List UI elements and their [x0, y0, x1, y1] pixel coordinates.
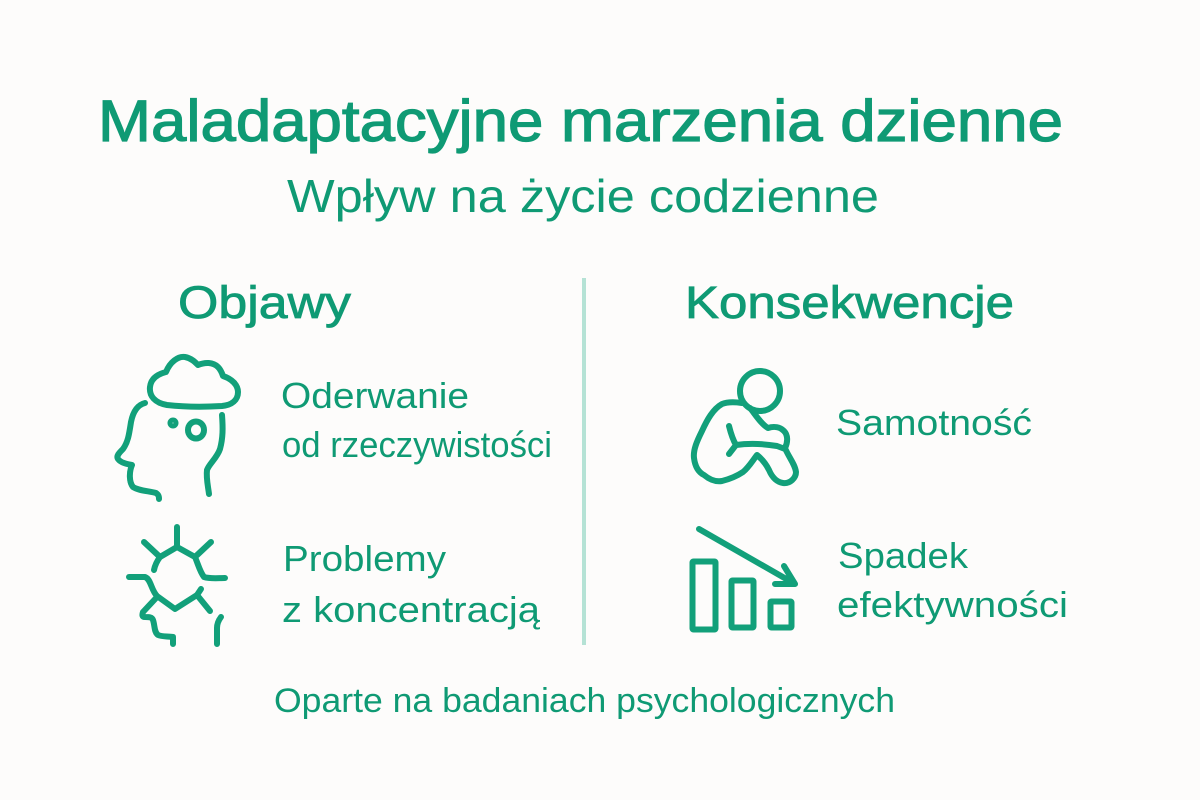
text: problemy: Problemy — [283, 538, 446, 579]
panel: objawy — [117, 277, 552, 644]
icon: head with cloud — [117, 357, 238, 499]
icon: cracked brain network — [129, 527, 225, 644]
icon: falling bar chart with arrow — [692, 529, 795, 630]
panel: konsekwencje — [685, 277, 1068, 630]
text: z koncentracją: z koncentracją — [282, 589, 541, 630]
text: oderwanie: Oderwanie — [281, 375, 469, 416]
text: samotność: Samotność — [836, 402, 1032, 443]
text: efektywności: efektywności — [837, 584, 1068, 625]
footer note: Oparte na badaniach psychologicznych — [274, 682, 895, 720]
text: od rzeczywistości: od rzeczywistości — [282, 424, 552, 465]
icon: lonely seated person — [694, 371, 796, 483]
heading: objawy: Objawy — [178, 277, 352, 328]
title: Maladaptacyjne marzenia dzienne — [98, 89, 1063, 154]
heading: konsekwencje: Konsekwencje — [685, 277, 1014, 328]
divider — [582, 278, 586, 645]
text: spadek: Spadek — [838, 535, 969, 576]
subtitle: Wpływ na życie codzienne — [287, 170, 879, 222]
